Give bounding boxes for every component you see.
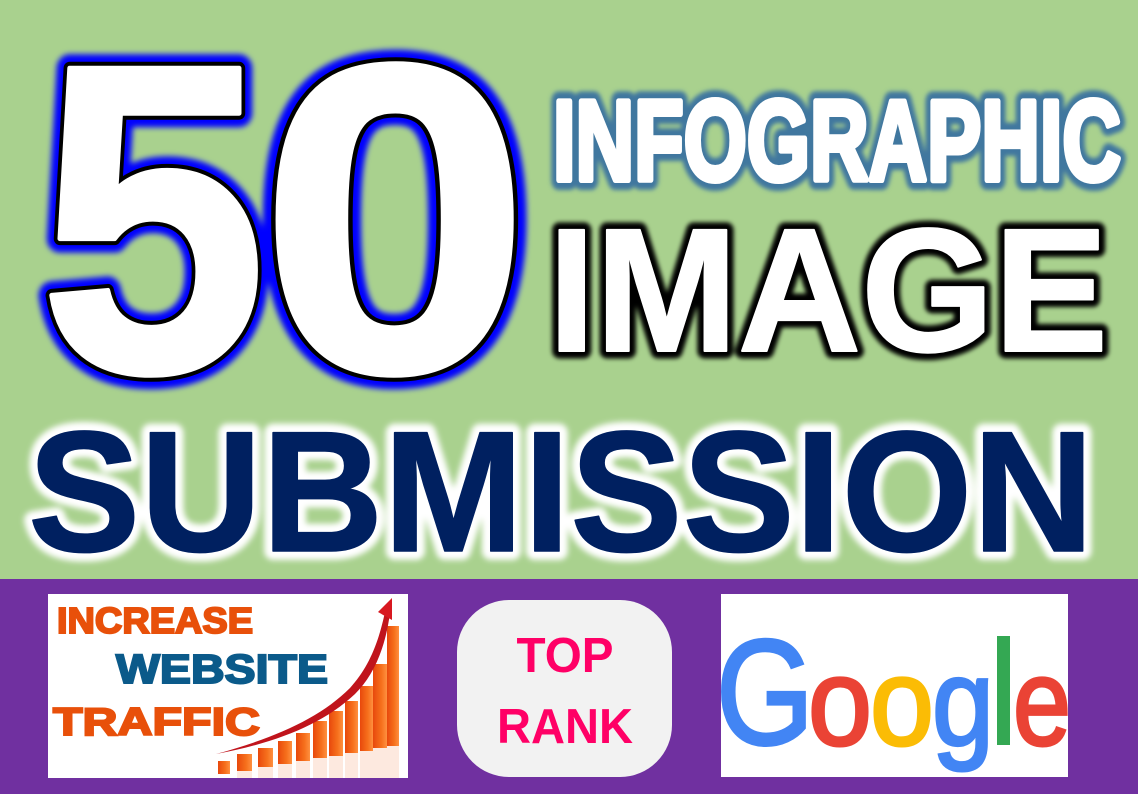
label: TRAFFIC: TRAFFIC bbox=[53, 701, 260, 744]
panel: google logo: o bbox=[870, 634, 934, 772]
label: WEBSITE: WEBSITE bbox=[116, 646, 328, 692]
bar reflections bbox=[237, 746, 399, 778]
heading: IMAGE: IMAGE bbox=[548, 193, 1108, 389]
bar chart bbox=[218, 626, 399, 774]
heading: IMAGE: IMAGE bbox=[548, 193, 1108, 389]
panel: google logo: g bbox=[932, 634, 994, 772]
label: INCREASE: INCREASE bbox=[57, 600, 253, 641]
panel: google logo: G bbox=[716, 608, 814, 776]
panel: google logo bbox=[716, 594, 1071, 777]
panel: top rank badge: RANK bbox=[497, 700, 633, 754]
number 50 bbox=[39, 0, 531, 465]
panel: top rank badge: TOP bbox=[516, 629, 614, 683]
green background bbox=[0, 0, 1138, 579]
panel: google logo: o bbox=[808, 634, 872, 772]
heading: SUBMISSION: SUBMISSION bbox=[28, 396, 1094, 588]
arrow: rising trend bbox=[216, 598, 392, 754]
panel: top rank badge bbox=[457, 600, 672, 777]
purple footer band bbox=[0, 579, 1138, 794]
panel: google logo: e bbox=[1013, 634, 1071, 772]
panel: increase website traffic bbox=[48, 594, 408, 778]
heading: SUBMISSION: SUBMISSION bbox=[28, 396, 1094, 588]
